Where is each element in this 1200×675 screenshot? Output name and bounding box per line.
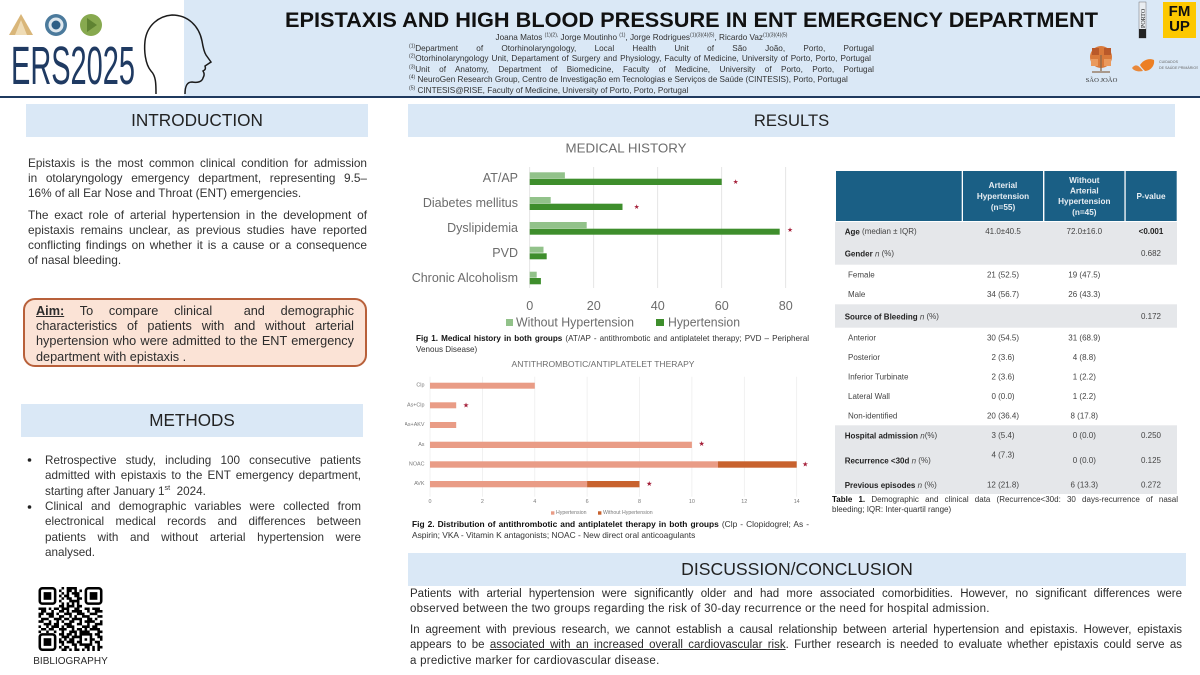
row labels: Female (848, 270, 875, 280)
affiliations: (1)Department of Otorhinolaryngology, Local Health Unit of São João, Porto, Portugal (409, 43, 874, 52)
caption: figure 2: Fig 2. Distribution of antithrombotic and antiplatelet therapy in both groups (Clp - Clopidogrel; As - (412, 519, 809, 529)
icon: primary care orange logo: CUIDADOS (1159, 60, 1179, 64)
heading: discussion/conclusion (408, 553, 1186, 586)
text block: discussion paragraph 2 (410, 624, 1182, 666)
axis labels: 0 (428, 499, 432, 505)
hypertension column (985, 227, 1021, 490)
significance stars: ★ (463, 402, 469, 410)
axis labels: 6 (586, 499, 589, 505)
axis labels: 4 (533, 499, 536, 505)
without hypertension column: 4 (8.8) (1073, 353, 1096, 362)
affiliations: (3)Unit of Anatomy, Department of Biomedicine, Faculty of Medicine, University of Porto, Porto, Portugal (409, 64, 874, 74)
without hypertension column: 0 (0.0) (1073, 456, 1096, 465)
icon: University of Porto logo (1138, 2, 1147, 38)
category labels: Dyslipidemia (447, 221, 518, 235)
chart: antithrombotic/antiplatelet therapy (405, 359, 808, 516)
hypertension column: 3 (5.4) (991, 431, 1015, 440)
category labels: AT/AP (483, 171, 518, 185)
text block: methods bullets: Retrospective study, including 100 consecutive patients (45, 454, 361, 467)
text block: methods bullets (45, 454, 361, 559)
icon: FMUP logo: FM (1169, 3, 1190, 20)
hypertension column: 2 (3.6) (991, 353, 1015, 362)
text block: discussion paragraph 2: In agreement with previous research, we cannot establish a causal relationship between arterial hypertension and epistaxis. However, epistaxis (410, 624, 1182, 636)
caption: table 1: bleeding; IQR: Inter-quartil range) (832, 505, 951, 514)
hypertension column: 34 (56.7) (987, 290, 1019, 299)
bars: hypertension group (430, 383, 718, 487)
axis labels: 0 (526, 299, 533, 313)
caption: figure 1: Fig 1. Medical history in both groups (AT/AP - antithrombotic and antiplatelet therapy; PVD – Peripheral (416, 334, 809, 343)
chart title: MEDICAL HISTORY (566, 140, 687, 156)
caption: figure 1: Venous Disease) (416, 345, 477, 354)
heading: results (408, 104, 1175, 137)
text block: discussion paragraph 2: appears to be associated with an increased overall cardiovascular risk. Further research is needed to evaluate whether epistaxis could serve as (410, 639, 1182, 651)
p-value column: <0.001 (1139, 227, 1164, 236)
icon: QR code (38, 587, 102, 651)
without hypertension column: 8 (17.8) (1071, 412, 1098, 420)
text block: introduction paragraph 1: in otolaryngology emergency department, representing 9.5– (28, 171, 367, 185)
hypertension column: 4 (7.3) (991, 450, 1015, 460)
without hypertension column: 19 (47.5) (1068, 270, 1101, 280)
axis labels: 10 (689, 499, 695, 505)
text block: introduction paragraph 2: of nasal bleeding. (28, 253, 121, 267)
caption: figure 2 (412, 519, 809, 540)
significance stars (634, 178, 793, 234)
axis labels (526, 299, 793, 313)
text block: discussion paragraph 1 (410, 588, 1182, 615)
callout: aim: characteristics of patients with and without arterial (36, 319, 354, 333)
table header: P-value (1136, 192, 1166, 201)
icon: head profile outline (144, 14, 212, 94)
text block: introduction paragraph 1 (28, 156, 367, 200)
row labels: Recurrence <30d n (%) (845, 456, 931, 465)
row labels: Posterior (848, 353, 880, 362)
axis labels (428, 499, 800, 505)
chart: medical history (412, 140, 793, 330)
icon: FMUP logo (1163, 2, 1196, 38)
category labels (412, 171, 518, 285)
text block: methods bullets: Clinical and demographic variables were collected from (45, 500, 361, 513)
without hypertension column: 1 (2.2) (1073, 392, 1096, 401)
table: demographic and clinical data (835, 171, 1177, 494)
legend: Without Hypertension (516, 316, 634, 330)
header rule (0, 96, 1200, 98)
shaded rows (835, 222, 1177, 494)
category labels: AVK (414, 481, 425, 487)
axis labels: 80 (779, 299, 793, 313)
heading: introduction (26, 104, 368, 137)
axis labels: 8 (638, 499, 641, 505)
text block: discussion paragraph 1: Patients with arterial hypertension were significantly older and had more associated comorbidities. However, no significant differences were (410, 588, 1182, 600)
table header: (n=45) (1072, 208, 1097, 217)
axis labels: 12 (741, 499, 747, 505)
affiliations (409, 43, 874, 95)
row labels (845, 227, 939, 490)
icon: primary care orange logo: DE SAÚDE PRIMÁRIOS (1159, 65, 1198, 70)
without hypertension column: 1 (2.2) (1073, 372, 1096, 382)
significance stars: ★ (634, 203, 640, 211)
text block: methods bullets: patients with and without arterial hypertension were (45, 531, 361, 544)
row labels: Previous episodes n (%) (845, 480, 937, 490)
callout: aim (23, 298, 367, 367)
icon: University of Porto logo: PORTO (1141, 8, 1147, 28)
row labels: Inferior Turbinate (848, 372, 909, 382)
significance stars: ★ (699, 440, 705, 448)
legend: Hypertension (668, 316, 740, 330)
caption: table 1: Table 1. Demographic and clinical data (Recurrence<30d: 30 days-recurrence of nasal (832, 494, 1178, 504)
category labels: As+Clp (407, 402, 424, 408)
icon: bullet points (28, 458, 32, 509)
legend: Hypertension (556, 510, 587, 516)
hypertension column: 21 (52.5) (987, 270, 1019, 280)
text block: methods bullets: admitted with epistaxis to the ENT emergency department, (45, 469, 361, 482)
callout: aim: department with epistaxis . (36, 350, 186, 364)
text block: methods bullets: electronical medical records and differences between (45, 515, 361, 528)
affiliations: (5) CINTESIS@RISE, Faculty of Medicine, University of Porto, Porto, Portugal (409, 85, 688, 95)
p-value column (1139, 227, 1164, 490)
without hypertension column: 0 (0.0) (1073, 431, 1096, 440)
icon: São João hospital logo: SÃO JOÃO (1086, 76, 1118, 84)
p-value column: 0.250 (1141, 431, 1162, 440)
p-value column: 0.172 (1141, 312, 1162, 321)
legend: Without Hypertension (603, 510, 653, 516)
heading: results: RESULTS (754, 111, 829, 130)
table header (836, 171, 1177, 221)
axis labels: 60 (715, 299, 729, 313)
significance stars: ★ (646, 480, 652, 488)
without hypertension column: 31 (68.9) (1068, 334, 1101, 342)
axis labels: 2 (481, 499, 484, 505)
left logos: partner emblems (9, 14, 102, 36)
caption: figure 1 (416, 334, 809, 354)
table header: Hypertension (977, 192, 1029, 201)
text block: introduction paragraph 1: 16% of all Ear Nose and Throat (ENT) emergencies. (28, 186, 301, 200)
callout: aim: hypertension who were admitted to the ENT emergency (36, 334, 354, 348)
hypertension column: 2 (3.6) (991, 372, 1015, 382)
axis labels: 20 (587, 299, 601, 313)
without hypertension column (1067, 227, 1103, 490)
label: bibliography: BIBLIOGRAPHY (33, 656, 108, 667)
text block: introduction paragraph 2 (28, 208, 368, 267)
affiliations: (2)Otorhinolaryngology Unit, Departament of Surgery and Physiology, Faculty of Medicine, University of Porto, Porto, Portugal (409, 53, 871, 63)
category labels: Diabetes mellitus (423, 196, 518, 210)
icon: gold triangle emblem (9, 14, 33, 35)
text block: methods bullets: analysed. (45, 546, 95, 559)
axis labels: 14 (794, 499, 800, 505)
text block: discussion paragraph 1: observed between the two groups regarding the risk of 30-day recurrence or the need for hospital admission. (410, 603, 990, 615)
row labels: Gender n (%) (845, 249, 894, 258)
callout: aim: Aim: To compare clinical and demographic (36, 304, 354, 318)
affiliations: (4) NeuroGen Research Group, Centro de Investigação em Tecnologias e Serviços de Saúde (CINTESIS), Porto, Portugal (409, 75, 848, 84)
icon: blue round seal (45, 14, 67, 36)
caption: table 1 (832, 494, 1178, 514)
title: EPISTAXIS AND HIGH BLOOD PRESSURE IN ENT EMERGENCY DEPARTMENT (285, 8, 1098, 32)
heading: methods: METHODS (149, 411, 235, 430)
row labels: Source of Bleeding n (%) (845, 312, 939, 321)
table header: Hypertension (1058, 197, 1110, 206)
bars: PVD (530, 247, 547, 259)
hypertension column: 41.0±40.5 (985, 227, 1021, 236)
row labels: Hospital admission n(%) (845, 431, 938, 440)
text block: introduction paragraph 2: conflicting findings on whether it is a cause or a consequence (28, 238, 367, 252)
category labels: Clp (416, 382, 424, 388)
authors: Joana Matos (1)(2), Jorge Moutinho (1), Jorge Rodrigues(1)(3)(4)(5), Ricardo Vaz(1)(3)(4)(5) (496, 32, 787, 42)
category labels: Chronic Alcoholism (412, 271, 518, 285)
text block: introduction paragraph 1: Epistaxis is the most common clinical condition for admission (28, 156, 367, 170)
significance stars: ★ (733, 178, 739, 186)
without hypertension column: 6 (13.3) (1071, 480, 1098, 490)
heading: discussion/conclusion: DISCUSSION/CONCLUSION (681, 559, 913, 579)
p-value column: 0.125 (1141, 456, 1162, 465)
icon: São João hospital logo (1086, 46, 1118, 84)
icon: FMUP logo: UP (1169, 18, 1190, 34)
category labels: NOAC (409, 462, 425, 468)
row labels: Lateral Wall (848, 392, 890, 401)
significance stars: ★ (802, 461, 808, 469)
table header: Arterial (989, 181, 1017, 190)
bars: dyslipidemia (530, 222, 780, 235)
heading: introduction: INTRODUCTION (131, 110, 263, 130)
hypertension column: 30 (54.5) (987, 334, 1019, 342)
hypertension column: 12 (21.8) (987, 480, 1019, 490)
without hypertension column: 26 (43.3) (1068, 290, 1101, 299)
icon: primary care orange logo (1132, 59, 1198, 72)
p-value column: 0.682 (1141, 249, 1162, 258)
chart title: ANTITHROMBOTIC/ANTIPLATELET THERAPY (512, 359, 695, 369)
bars: without hypertension group (587, 461, 797, 487)
significance stars (463, 402, 808, 488)
header band (184, 0, 1200, 96)
hypertension column: 20 (36.4) (987, 412, 1019, 420)
icon: green circle (80, 14, 102, 36)
legend (506, 316, 740, 330)
category labels: PVD (492, 246, 518, 260)
without hypertension column: 72.0±16.0 (1067, 227, 1103, 236)
table header: Arterial (1070, 186, 1099, 196)
category labels: As (418, 442, 425, 448)
row labels: Non-identified (848, 412, 897, 420)
bars: AT/AP (530, 172, 722, 185)
bars: diabetes mellitus (530, 197, 622, 210)
text block: introduction paragraph 2: epistaxis remains unclear, as previous studies have reported (28, 223, 367, 237)
caption: figure 2: Aspirin; VKA - Vitamin K antagonists; NOAC - New direct oral anticoagulants (412, 530, 695, 540)
row labels: Anterior (848, 334, 876, 342)
row labels: Male (848, 290, 866, 299)
text block: introduction paragraph 2: The exact role of arterial hypertension in the development of (28, 208, 367, 222)
text block: discussion paragraph 2: a predictive marker for cardiovascular disease. (410, 654, 660, 666)
p-value column: 0.272 (1141, 480, 1162, 490)
legend (551, 510, 653, 516)
heading: methods (21, 404, 363, 437)
text block: methods bullets: starting after January 1st 2024. (45, 483, 206, 498)
table header: (n=55) (991, 203, 1015, 212)
table header: Without (1069, 176, 1100, 185)
hypertension column: 0 (0.0) (991, 392, 1015, 401)
row labels: Age (median ± IQR) (845, 227, 917, 236)
significance stars: ★ (787, 226, 793, 234)
bars: chronic alcoholism (530, 272, 541, 284)
axis labels: 40 (651, 299, 665, 313)
category labels (404, 382, 425, 487)
